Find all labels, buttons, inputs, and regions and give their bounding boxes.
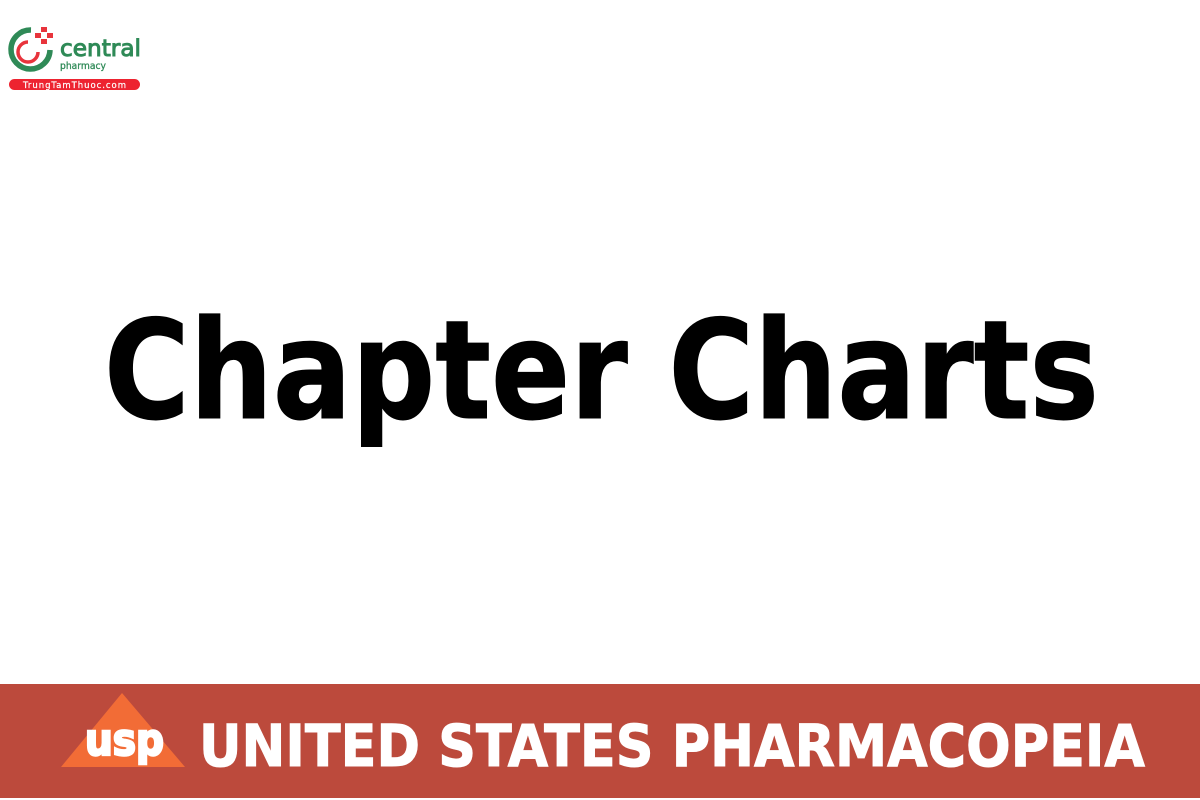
logo url pill: TrungTamThuoc.com xyxy=(22,81,126,91)
icon: usp triangle logo xyxy=(61,693,185,767)
banner xyxy=(0,684,1200,798)
logo: central pharmacy xyxy=(9,27,141,91)
logo wordmark: central: central xyxy=(60,36,141,62)
icon: usp triangle logo: usp xyxy=(85,715,164,766)
icon: green and red rings with cross xyxy=(11,27,53,69)
logo wordmark: pharmacy: pharmacy xyxy=(60,61,106,72)
